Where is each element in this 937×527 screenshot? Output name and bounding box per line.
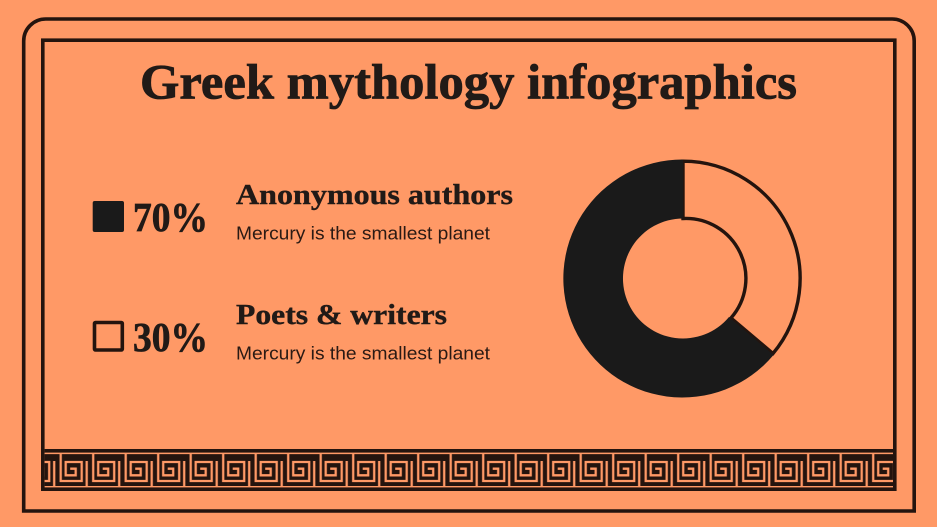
percentage 70%: 70% <box>133 194 208 240</box>
description: Mercury is the smallest planet <box>236 222 490 244</box>
title: Greek mythology infographics <box>140 54 797 110</box>
greek key border <box>45 449 893 486</box>
inner frame <box>43 40 895 489</box>
icon: outlined square <box>94 322 122 350</box>
donut chart <box>563 159 800 397</box>
legend item: poets and writers <box>94 299 490 364</box>
icon: filled square <box>93 201 124 232</box>
percentage 30%: 30% <box>133 314 208 360</box>
heading: anonymous authors: Anonymous authors <box>236 179 513 211</box>
segment: 70% filled <box>563 159 774 397</box>
legend item: anonymous authors <box>93 179 513 244</box>
segment: 30% outlined <box>683 161 800 354</box>
heading: poets and writers: Poets & writers <box>236 299 447 331</box>
description: Mercury is the smallest planet <box>236 342 490 364</box>
